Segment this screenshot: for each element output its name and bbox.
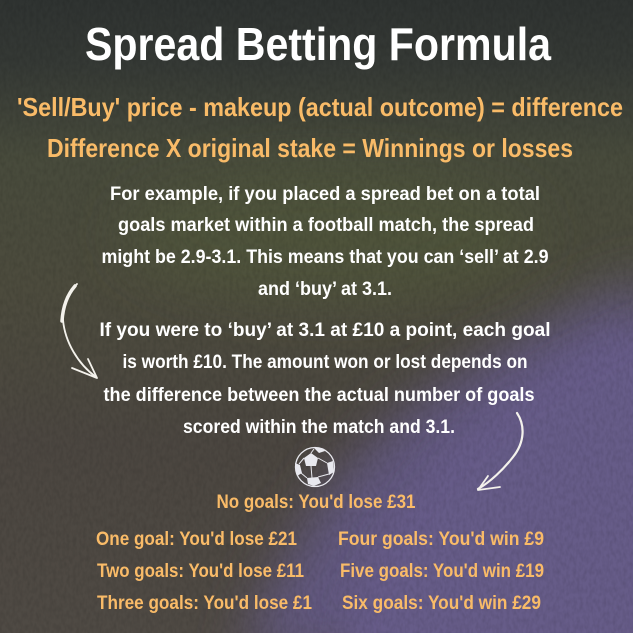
paragraph: example spread: might be 2.9-3.1. This means that you can ‘sell’ at 2.9 xyxy=(102,247,548,268)
outcome: no goals: No goals: You'd lose £31 xyxy=(216,492,416,513)
icon: right curved arrow xyxy=(478,413,523,490)
outcomes: winning scenarios: Four goals: You'd win £9 xyxy=(338,529,544,550)
outcomes: losing scenarios: Three goals: You'd lose £1 xyxy=(97,593,312,614)
outcomes: winning scenarios: Five goals: You'd win £19 xyxy=(340,561,544,582)
paragraph: buying at 3.1: If you were to ‘buy’ at 3.1 at £10 a point, each goal xyxy=(100,320,550,341)
outcomes: losing scenarios xyxy=(96,529,312,614)
paragraph: example spread: goals market within a football match, the spread xyxy=(118,215,534,236)
paragraph: example spread: and ‘buy’ at 3.1. xyxy=(258,279,392,300)
outcomes: losing scenarios: One goal: You'd lose £21 xyxy=(96,529,297,550)
paragraph: buying at 3.1: is worth £10. The amount won or lost depends on xyxy=(122,352,528,373)
title: Spread Betting Formula xyxy=(85,18,551,70)
icon: football xyxy=(295,448,334,486)
icon: left curved arrow xyxy=(62,284,97,378)
paragraph: example spread: For example, if you placed a spread bet on a total xyxy=(110,184,540,205)
paragraph: buying at 3.1: the difference between the actual number of goals xyxy=(104,385,534,406)
outcomes: winning scenarios: Six goals: You'd win £29 xyxy=(342,593,541,614)
outcomes: losing scenarios: Two goals: You'd lose £11 xyxy=(97,561,304,582)
paragraph: example spread xyxy=(102,184,548,300)
formula: winnings or losses: Difference X original stake = Winnings or losses xyxy=(47,133,573,163)
paragraph: buying at 3.1: scored within the match and 3.1. xyxy=(183,417,455,438)
outcomes: winning scenarios xyxy=(338,529,544,614)
paragraph: buying at 3.1 xyxy=(100,320,550,438)
